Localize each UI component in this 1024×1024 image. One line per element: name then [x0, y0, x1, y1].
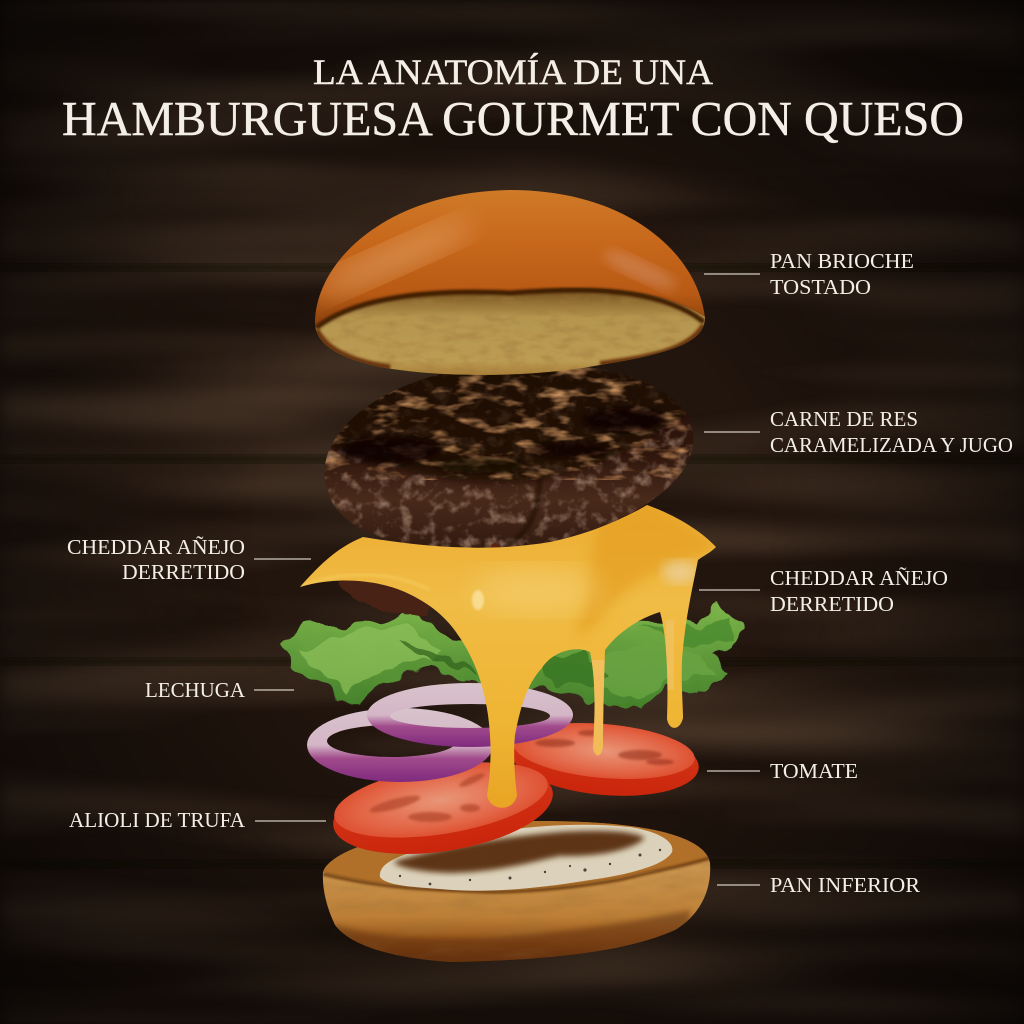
labels: right column: PAN BRIOCHE [770, 249, 914, 273]
illustration: red onion rings [307, 683, 573, 782]
labels: right column: TOMATE [770, 759, 858, 783]
labels: left column: ALIOLI DE TRUFA [69, 808, 246, 832]
labels: right column: PAN INFERIOR [770, 873, 920, 897]
labels: left column: CHEDDAR AÑEJO [67, 535, 245, 559]
illustration: melted cheddar [295, 500, 720, 815]
icon: truffle aioli spread [380, 825, 672, 891]
leader lines [254, 274, 760, 885]
illustration: bottom bun [315, 815, 715, 965]
labels: right column: CARNE DE RES [770, 407, 918, 431]
illustration: lower patty edge [338, 580, 430, 616]
labels: right column: CHEDDAR AÑEJO [770, 566, 948, 590]
labels: left column: LECHUGA [145, 678, 246, 702]
labels: left column: DERRETIDO [122, 560, 245, 584]
title: HAMBURGUESA GOURMET CON QUESO [62, 91, 964, 146]
labels: right column: TOSTADO [770, 275, 871, 299]
labels: right column [770, 249, 1013, 897]
title [62, 52, 964, 146]
title: LA ANATOMÍA DE UNA [313, 52, 713, 92]
illustration: lettuce [284, 604, 743, 712]
illustration: tomato slices [327, 716, 702, 868]
illustration: top bun [310, 185, 710, 385]
labels: right column: CARAMELIZADA Y JUGO [770, 433, 1013, 457]
illustration: beef patty [325, 367, 694, 548]
labels: left column [67, 535, 246, 832]
labels: right column: DERRETIDO [770, 592, 894, 616]
